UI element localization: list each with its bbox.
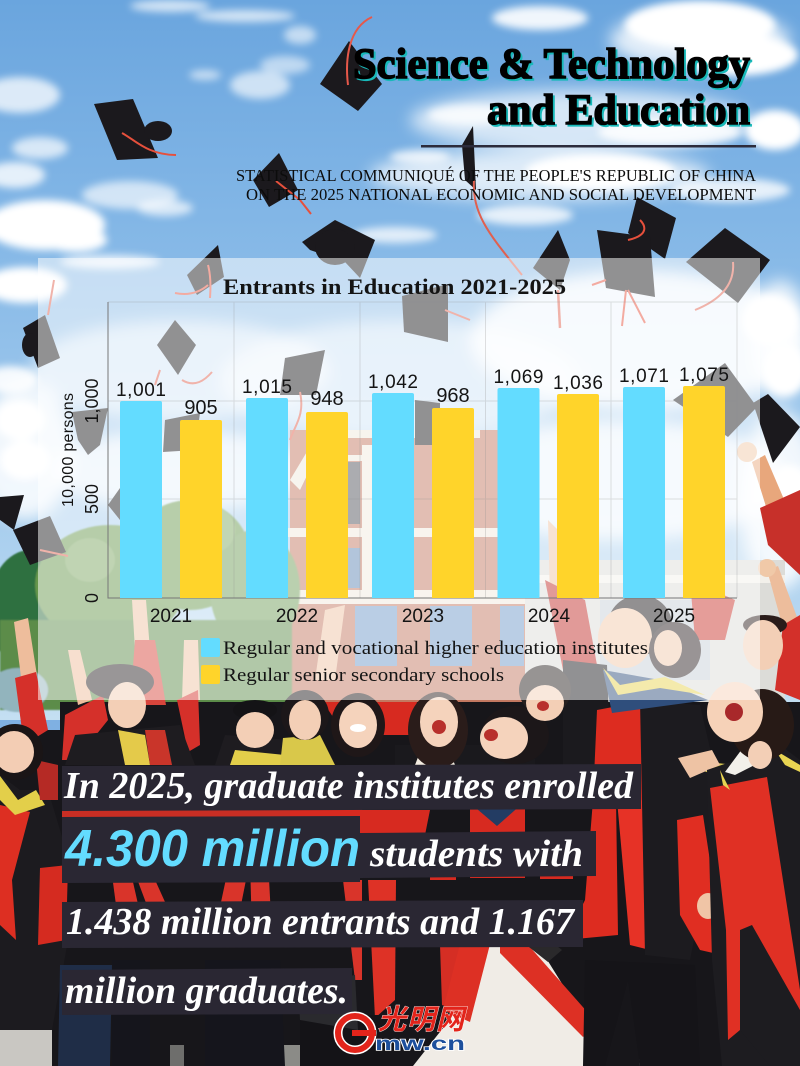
icon: cap behind 2021 [163, 413, 200, 452]
crowd: right graduate in blue-yellow hood [552, 660, 750, 1066]
icon: cap right of bars [753, 394, 800, 463]
x axis labels [150, 606, 695, 627]
x axis labels: 2023 [402, 606, 444, 627]
icons: flying graduation caps [0, 17, 800, 565]
panel: translucent chart card [38, 258, 760, 700]
y axis labels: 0 [82, 593, 102, 603]
value labels: 1,015 [242, 377, 292, 398]
x axis labels: 2021 [150, 606, 192, 627]
crowd: raised arms and sleeves [14, 442, 800, 760]
crowd: lower backdrop of robes and pavement [0, 702, 800, 1066]
subtitle: STATISTICAL COMMUNIQUÉ OF THE PEOPLE'S REPUBLIC OF CHINA [236, 166, 757, 185]
value labels: 1,075 [679, 365, 729, 386]
legend [201, 638, 648, 686]
crowd: centre graduates [280, 702, 573, 1066]
callout key number: 4.300 million [64, 820, 360, 878]
icon: cap upper mid [462, 126, 522, 275]
icon: cap right 3 [628, 197, 676, 259]
value labels: 1,069 [494, 367, 544, 388]
icon: cap top centre [320, 17, 382, 111]
callout line 1: In 2025, graduate institutes enrolled [63, 765, 634, 807]
value labels: 968 [436, 385, 470, 407]
crowd: white dress and red sash [413, 905, 597, 1066]
crowd: left graduates [0, 725, 362, 1066]
logo: Guangming Online [338, 998, 468, 1055]
value labels: 1,071 [619, 366, 669, 387]
divider under title [421, 145, 756, 148]
legend: Regular senior secondary schools [223, 665, 504, 686]
icon: cap left lower 1 [0, 495, 24, 530]
value labels: 1,042 [368, 372, 418, 393]
background: clouds [0, 0, 800, 515]
heading: title: Science & Technology [355, 43, 752, 90]
heading: title: and Education [487, 87, 750, 134]
icon: cap left edge [22, 280, 60, 368]
icon: cap small [108, 488, 120, 520]
background: soft cloud haze [0, 10, 800, 590]
chart title: Entrants in Education 2021-2025 [223, 274, 566, 299]
icon: cap left axis [72, 408, 108, 455]
highlight bands [62, 764, 641, 1015]
x axis labels: 2022 [276, 606, 318, 627]
icon: cap upper mid left [253, 153, 311, 214]
callout: graduate institutes statement [62, 764, 641, 1015]
heading: title [353, 41, 752, 136]
icon: cap centre [302, 220, 375, 278]
icon: cap right 2 [592, 220, 655, 326]
y axis labels: 500 [82, 484, 102, 514]
icon: cap right 1 [533, 230, 570, 328]
legend: Regular and vocational higher education institutes [223, 638, 648, 659]
crowd: heads and faces [0, 595, 794, 780]
icon: cap behind 2023 [415, 400, 440, 445]
x axis labels: 2024 [528, 606, 571, 627]
logo: Guangming Online: 光明网 [378, 998, 468, 1038]
crowd: right front graduate [707, 745, 800, 1066]
y axis labels [60, 378, 102, 603]
icon: cap left lower 2 [13, 516, 68, 565]
y axis labels: 10,000 persons [60, 393, 77, 507]
background: building [286, 430, 785, 710]
value labels: 1,001 [116, 380, 166, 401]
x axis labels: 2025 [653, 606, 695, 627]
y axis labels: 1,000 [82, 378, 102, 424]
icon: cap near 2022 [280, 350, 325, 440]
callout line 4: million graduates. [65, 970, 348, 1012]
logo: Guangming Online: mw.cn [375, 1034, 465, 1055]
chart: entrants in education [60, 274, 737, 686]
icon: cap behind 2025 [673, 363, 757, 437]
subtitle: ON THE 2025 NATIONAL ECONOMIC AND SOCIAL DEVELOPMENT [246, 185, 757, 204]
callout line 2: students with [369, 833, 583, 875]
bars: senior secondary schools [180, 386, 725, 598]
icon: cap at chart top [175, 245, 224, 298]
icon: cap at chart centre [402, 284, 470, 342]
background: trees [0, 500, 300, 712]
background: sky [0, 0, 800, 720]
icon: cap top left [94, 99, 176, 160]
value labels: 905 [184, 397, 218, 419]
value labels [116, 365, 729, 419]
callout line 3: 1.438 million entrants and 1.167 [66, 901, 576, 943]
value labels: 948 [310, 388, 344, 410]
subtitle [236, 166, 757, 204]
bars: higher education institutes [120, 387, 665, 598]
icon: cap left panel [155, 320, 212, 385]
heading: title: and Education [489, 89, 752, 136]
icon: cap right 4 [686, 228, 770, 310]
chart grid and axes [108, 302, 737, 598]
heading: title: Science & Technology [353, 41, 750, 88]
value labels: 1,036 [553, 373, 603, 394]
